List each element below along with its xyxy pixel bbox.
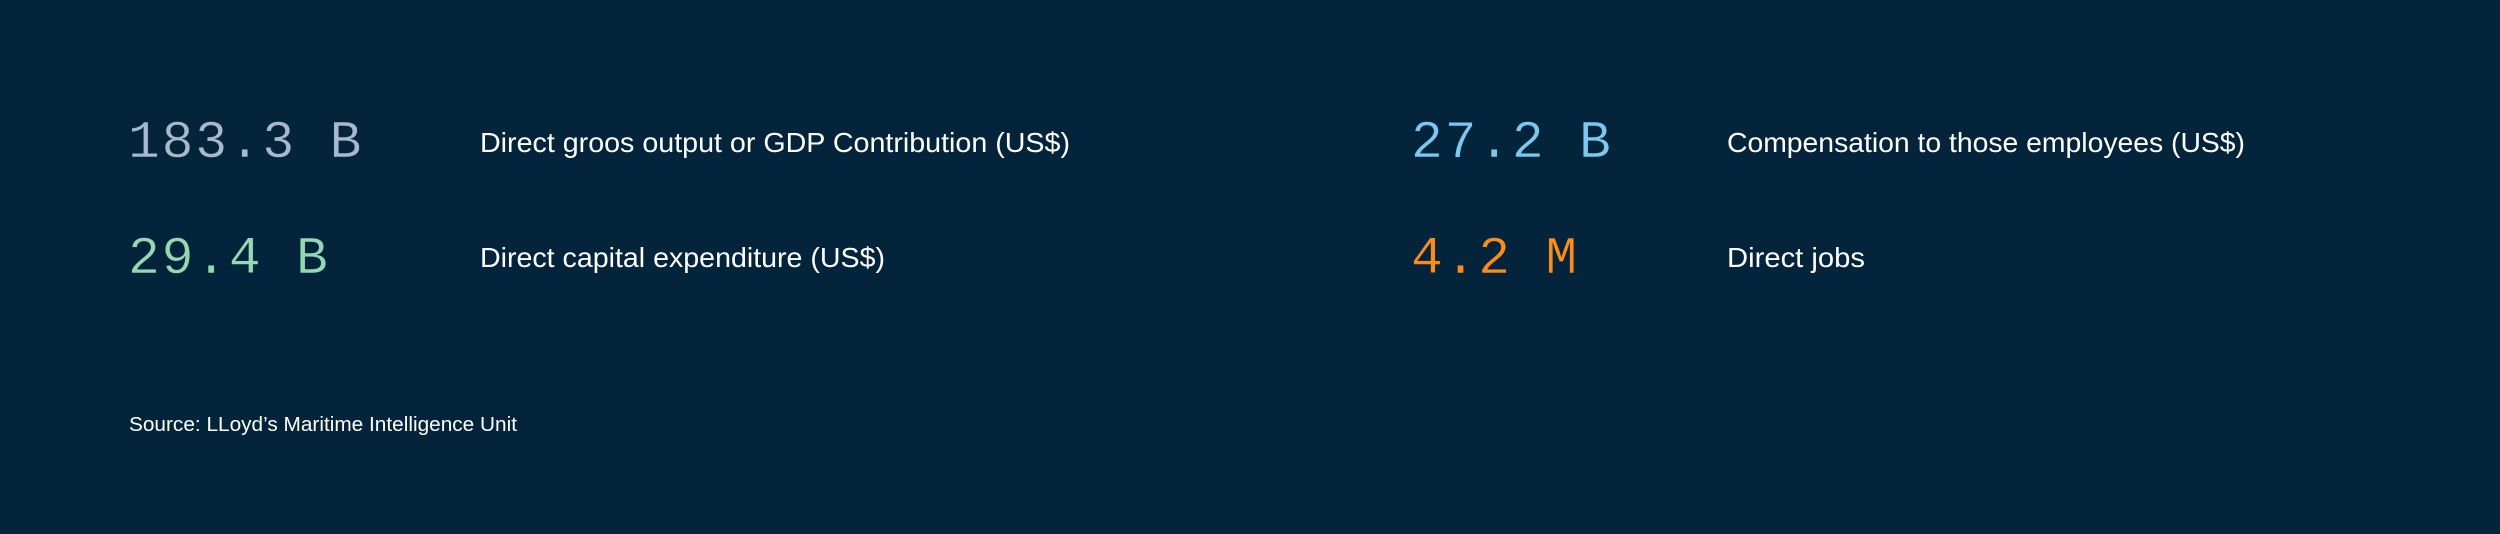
stat: compensation value: 27.2 B — [1411, 113, 1613, 173]
stat: gross output value: 183.3 B — [128, 113, 363, 173]
stat label: compensation: Compensation to those employees (US$) — [1727, 127, 2245, 158]
stat label: direct jobs: Direct jobs — [1727, 242, 1865, 273]
source note: Source: LLoyd’s Maritime Intelligence Unit — [129, 414, 517, 436]
stat: direct jobs value: 4.2 M — [1411, 229, 1579, 289]
stat: capital expenditure value: 29.4 B — [128, 229, 330, 289]
stat label: capital expenditure: Direct capital expenditure (US$) — [480, 242, 885, 273]
stat label: gross output: Direct groos output or GDP Contribution (US$) — [480, 127, 1070, 158]
